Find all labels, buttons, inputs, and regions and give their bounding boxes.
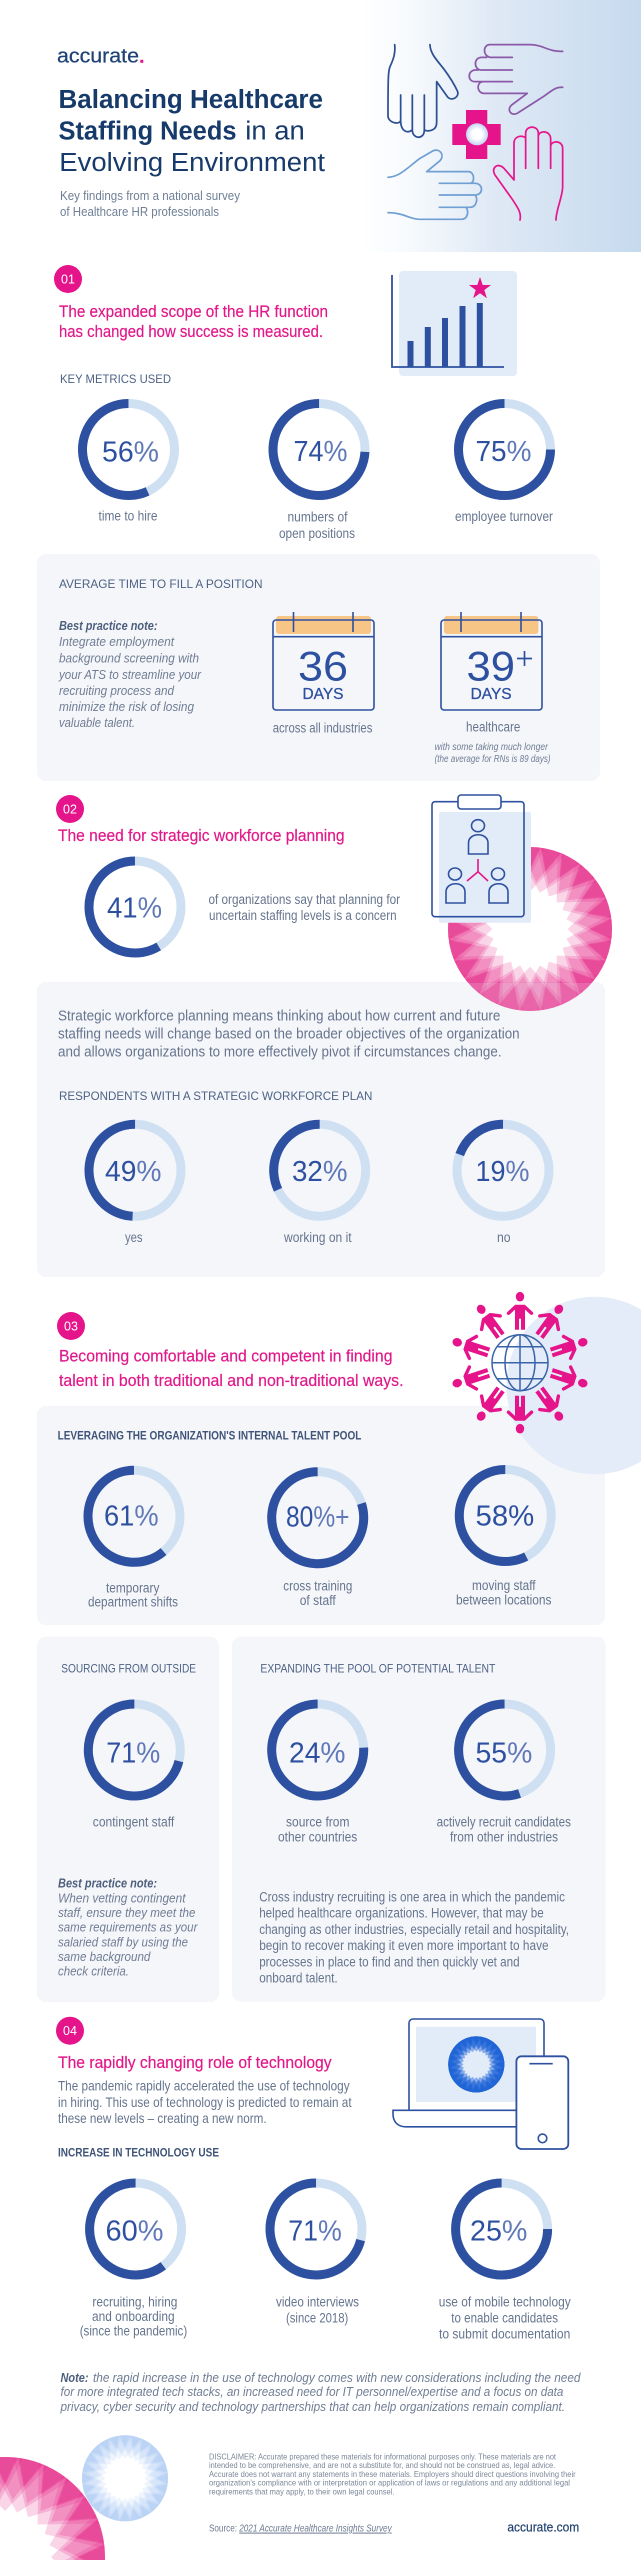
key metrics label: KEY METRICS USED bbox=[60, 372, 171, 386]
logo: accurate bbox=[57, 46, 139, 68]
stat: 41% planning concern: of organizations say that planning for bbox=[208, 892, 400, 907]
closing note: the rapid increase in the use of technology comes with new considerations including the need bbox=[93, 2370, 581, 2385]
section 03 number badge bbox=[57, 1312, 85, 1340]
purple hand bbox=[469, 45, 563, 114]
stat: 74% numbers of open positions bbox=[271, 401, 367, 541]
cross industry paragraph: begin to recover making it even more important to have bbox=[259, 1938, 549, 1953]
stat: 32% working on it: 32% bbox=[292, 1156, 348, 1188]
stat: 41% planning concern: uncertain staffing levels is a concern bbox=[209, 908, 397, 923]
stat: 55% recruit from other industries: 55% bbox=[476, 1737, 532, 1769]
section 04 heading: The rapidly changing role of technology bbox=[58, 2054, 332, 2072]
technology paragraph: these new levels – creating a new norm. bbox=[58, 2110, 267, 2126]
stat: 41% planning concern: 41% bbox=[107, 893, 162, 925]
decorative pink starburst bbox=[437, 836, 623, 1022]
closing note bbox=[60, 2370, 581, 2414]
stat: 56% time to hire: 56% bbox=[102, 437, 159, 469]
section 04 number badge: 04 bbox=[63, 2024, 77, 2038]
stat: 71% video interviews bbox=[260, 2173, 372, 2326]
stat: 19% no: no bbox=[497, 1230, 511, 1245]
panel: sourcing from outside bbox=[37, 1637, 219, 2002]
icon: rising bar chart with star bbox=[392, 271, 517, 376]
technology use heading: INCREASE IN TECHNOLOGY USE bbox=[58, 2145, 219, 2159]
section 01 heading bbox=[59, 303, 328, 341]
closing note: for more integrated tech stacks, an increased need for IT personnel/expertise and a focus on data bbox=[60, 2384, 563, 2399]
stat: 25% mobile technology bbox=[439, 2183, 571, 2342]
panel: expanding the pool bbox=[232, 1637, 606, 2002]
stat: 58% moving staff between locations: 58% bbox=[476, 1501, 534, 1533]
calendar: 36 days: DAYS bbox=[302, 686, 344, 703]
stat: 61% temporary department shifts: department shifts bbox=[88, 1595, 178, 1610]
icon: medical cross bbox=[452, 110, 501, 159]
stat: 58% moving staff between locations bbox=[443, 1454, 567, 1607]
stat: 56% time to hire bbox=[68, 389, 189, 524]
disclaimer: Accurate does not warrant any statements in these materials. Employers should direct questions involving their bbox=[209, 2470, 576, 2479]
stat: 74% numbers of open positions: open positions bbox=[279, 526, 355, 541]
disclaimer: requirements that may apply, to their own legal counsel. bbox=[209, 2487, 394, 2496]
section 04 number badge bbox=[56, 2017, 84, 2045]
disclaimer: DISCLAIMER: Accurate prepared these materials for informational purposes only. These materials are not bbox=[209, 2452, 557, 2461]
stat: 71% contingent staff: 71% bbox=[106, 1737, 160, 1769]
panel: internal talent pool bbox=[37, 1406, 605, 1625]
stat: 56% time to hire: time to hire bbox=[98, 509, 158, 524]
disclaimer: organization's compliance with or interpretation or application of laws or regulations and any additional legal bbox=[209, 2479, 570, 2488]
stat: 49% yes bbox=[87, 1122, 183, 1245]
stat: 24% source from other countries: source from bbox=[286, 1815, 350, 1830]
decorative light blue circle bbox=[506, 1297, 641, 1474]
cross industry paragraph: processes in place to find and then quickly vet and bbox=[259, 1954, 520, 1969]
stat: 61% temporary department shifts: 61% bbox=[104, 1501, 159, 1533]
stat: 25% mobile technology: to submit documentation bbox=[439, 2327, 570, 2342]
stat: 71% video interviews: video interviews bbox=[276, 2294, 359, 2309]
stat: 60% recruiting, hiring and onboarding: (since the pandemic) bbox=[80, 2324, 187, 2338]
stat: 49% yes: yes bbox=[125, 1230, 143, 1245]
panel: strategic workforce planning bbox=[37, 982, 605, 1277]
laptop blue starburst bbox=[444, 2032, 508, 2096]
stat: 75% employee turnover: employee turnover bbox=[455, 509, 553, 524]
stat: 71% contingent staff bbox=[79, 1694, 190, 1830]
cross industry paragraph: changing as other industries, especially retail and hospitality, bbox=[259, 1922, 569, 1937]
section 01 number badge bbox=[54, 265, 82, 293]
subtitle: of Healthcare HR professionals bbox=[60, 204, 219, 219]
stat: 60% recruiting, hiring and onboarding: and onboarding bbox=[92, 2309, 175, 2324]
stat: 25% mobile technology: 25% bbox=[470, 2215, 527, 2247]
panel heading: SOURCING FROM OUTSIDE bbox=[61, 1661, 196, 1675]
calendar: 36 days: 36 bbox=[298, 643, 348, 690]
stat: 24% source from other countries bbox=[269, 1702, 366, 1844]
internal talent heading: LEVERAGING THE ORGANIZATION'S INTERNAL TALENT POOL bbox=[58, 1428, 361, 1442]
stat: 60% recruiting, hiring and onboarding bbox=[71, 2165, 200, 2338]
calendar: 39+ days bbox=[441, 612, 542, 710]
best practice note: When vetting contingent bbox=[58, 1890, 187, 1905]
best practice note: recruiting process and bbox=[59, 683, 175, 698]
source line: 2021 Accurate Healthcare Insights Survey bbox=[238, 2524, 393, 2535]
best practice note: check criteria. bbox=[58, 1964, 129, 1979]
stat: 60% recruiting, hiring and onboarding: 60% bbox=[106, 2215, 164, 2247]
calendar: 36 days bbox=[273, 612, 374, 710]
workforce planning paragraph: and allows organizations to more effectively pivot if circumstances change. bbox=[58, 1045, 502, 1061]
closing note: privacy, cyber security and technology partnerships that can help organizations remain compliant. bbox=[60, 2399, 565, 2414]
stat: 60% recruiting, hiring and onboarding: recruiting, hiring bbox=[92, 2294, 177, 2309]
calendar labels: (the average for RNs is 89 days) bbox=[435, 754, 551, 765]
best practice note: staff, ensure they meet the bbox=[58, 1905, 195, 1920]
decorative blue starburst footer bbox=[76, 2429, 174, 2527]
section 02 number badge bbox=[56, 795, 84, 823]
stat: 32% working on it: working on it bbox=[283, 1230, 352, 1245]
calendar labels bbox=[273, 720, 551, 765]
stat: 80%+ cross training of staff: cross training bbox=[283, 1579, 352, 1594]
stat: 80%+ cross training of staff: 80%+ bbox=[286, 1502, 350, 1534]
best practice note: your ATS to streamline your bbox=[58, 667, 202, 682]
stat: 41% planning concern bbox=[72, 844, 400, 970]
calendar: 39+ days: 39 bbox=[466, 643, 515, 690]
stat: 49% yes: 49% bbox=[105, 1156, 162, 1188]
stat: 25% mobile technology: use of mobile technology bbox=[439, 2294, 571, 2309]
best practice note bbox=[58, 618, 202, 730]
stat: 71% contingent staff: contingent staff bbox=[93, 1815, 174, 1830]
stat: 55% recruit from other industries: from other industries bbox=[450, 1829, 558, 1844]
panel heading: AVERAGE TIME TO FILL A POSITION bbox=[59, 577, 262, 591]
stat: 19% no: 19% bbox=[476, 1156, 530, 1188]
stat: 24% source from other countries: 24% bbox=[289, 1737, 346, 1769]
source line: Source: bbox=[209, 2524, 237, 2535]
subtitle bbox=[60, 188, 240, 219]
section 03 number badge: 03 bbox=[64, 1320, 78, 1334]
workforce planning paragraph: Strategic workforce planning means thinking about how current and future bbox=[58, 1009, 500, 1025]
best practice note: same background bbox=[58, 1949, 151, 1964]
subtitle: Key findings from a national survey bbox=[60, 188, 240, 203]
stat: 75% employee turnover: 75% bbox=[476, 436, 532, 468]
section 02 heading: The need for strategic workforce planning bbox=[58, 827, 345, 845]
cross industry paragraph: helped healthcare organizations. However, that may be bbox=[259, 1906, 544, 1921]
header background bbox=[0, 0, 641, 252]
best practice note: Best practice note: bbox=[59, 618, 158, 633]
title: Balancing Healthcare bbox=[58, 86, 323, 114]
best practice note: minimize the risk of losing bbox=[59, 699, 195, 714]
workforce planning paragraph: staffing needs will change based on the broader objectives of the organization bbox=[58, 1027, 520, 1043]
calendar labels: with some taking much longer bbox=[435, 742, 549, 753]
technology paragraph: The pandemic rapidly accelerated the use of technology bbox=[58, 2078, 350, 2094]
best practice note: background screening with bbox=[59, 650, 199, 666]
stat: 71% video interviews: 71% bbox=[288, 2215, 342, 2247]
title: Evolving Environment bbox=[59, 149, 325, 177]
stat: 74% numbers of open positions: 74% bbox=[294, 436, 348, 468]
section 03 heading: Becoming comfortable and competent in finding bbox=[59, 1348, 392, 1366]
pink hand bbox=[494, 127, 563, 220]
calendar: 39+ days: DAYS bbox=[471, 686, 512, 703]
icon: four hands around medical cross bbox=[388, 45, 563, 220]
section 01 heading: has changed how success is measured. bbox=[59, 323, 323, 341]
technology paragraph bbox=[58, 2078, 352, 2126]
stat: 55% recruit from other industries: actively recruit candidates bbox=[437, 1815, 571, 1830]
cross industry paragraph bbox=[259, 1890, 569, 1986]
best practice note: Integrate employment bbox=[59, 634, 175, 649]
stat: 55% recruit from other industries bbox=[437, 1692, 571, 1844]
section 03 heading bbox=[59, 1348, 404, 1390]
calendar labels: healthcare bbox=[466, 720, 520, 735]
title: Staffing Needs bbox=[58, 118, 236, 146]
icon: people around globe bbox=[449, 1292, 591, 1434]
cross industry paragraph: Cross industry recruiting is one area in which the pandemic bbox=[259, 1890, 565, 1905]
best practice note: salaried staff by using the bbox=[58, 1934, 188, 1949]
section 01 heading: The expanded scope of the HR function bbox=[59, 303, 328, 321]
section 01 number badge: 01 bbox=[61, 272, 75, 286]
closing note: Note: bbox=[60, 2370, 88, 2385]
stat: 24% source from other countries: other countries bbox=[278, 1829, 358, 1844]
stat: 25% mobile technology: to enable candidates bbox=[451, 2310, 558, 2326]
starburst panel overlap tint bbox=[468, 983, 592, 1011]
disclaimer: intended to be comprehensive, and are not a substitute for, and should not be construed as, legal advice. bbox=[209, 2461, 555, 2470]
best practice note: valuable talent. bbox=[59, 715, 135, 730]
stat: 80%+ cross training of staff: of staff bbox=[300, 1593, 336, 1608]
stat: 74% numbers of open positions: numbers of bbox=[288, 510, 348, 525]
decorative pink starburst footer bbox=[0, 2443, 119, 2560]
stat: 58% moving staff between locations: between locations bbox=[456, 1592, 552, 1607]
panel heading: EXPANDING THE POOL OF POTENTIAL TALENT bbox=[260, 1661, 496, 1675]
website: accurate.com bbox=[507, 2520, 579, 2535]
navy hand bbox=[388, 45, 458, 137]
stat: 61% temporary department shifts: temporary bbox=[106, 1580, 160, 1595]
technology paragraph: in hiring. This use of technology is predicted to remain at bbox=[58, 2094, 352, 2110]
stat: 61% temporary department shifts bbox=[69, 1451, 199, 1610]
stat: 32% working on it bbox=[259, 1109, 381, 1245]
best practice note: Best practice note: bbox=[58, 1876, 157, 1891]
stat: 71% video interviews: (since 2018) bbox=[286, 2310, 348, 2326]
stat: 58% moving staff between locations: moving staff bbox=[472, 1578, 536, 1593]
section 02 number badge: 02 bbox=[63, 802, 77, 816]
stat: 75% employee turnover bbox=[455, 404, 553, 524]
panel: average time to fill bbox=[37, 554, 600, 781]
light blue hand bbox=[388, 150, 481, 219]
best practice note bbox=[58, 1876, 198, 1979]
icon: clipboard with org chart bbox=[432, 795, 531, 923]
title: in an bbox=[245, 118, 305, 146]
icon: laptop and phone bbox=[393, 2019, 568, 2149]
respondents heading: RESPONDENTS WITH A STRATEGIC WORKFORCE PLAN bbox=[59, 1089, 372, 1103]
workforce planning paragraph bbox=[58, 1009, 520, 1061]
title bbox=[58, 86, 325, 177]
stat: 19% no bbox=[444, 1111, 562, 1245]
disclaimer bbox=[209, 2452, 576, 2496]
cross industry paragraph: onboard talent. bbox=[259, 1971, 338, 1986]
calendar labels: across all industries bbox=[273, 721, 373, 736]
stat: 80%+ cross training of staff bbox=[260, 1460, 376, 1608]
section 03 heading: talent in both traditional and non-traditional ways. bbox=[59, 1372, 404, 1390]
best practice note: same requirements as your bbox=[58, 1920, 198, 1935]
